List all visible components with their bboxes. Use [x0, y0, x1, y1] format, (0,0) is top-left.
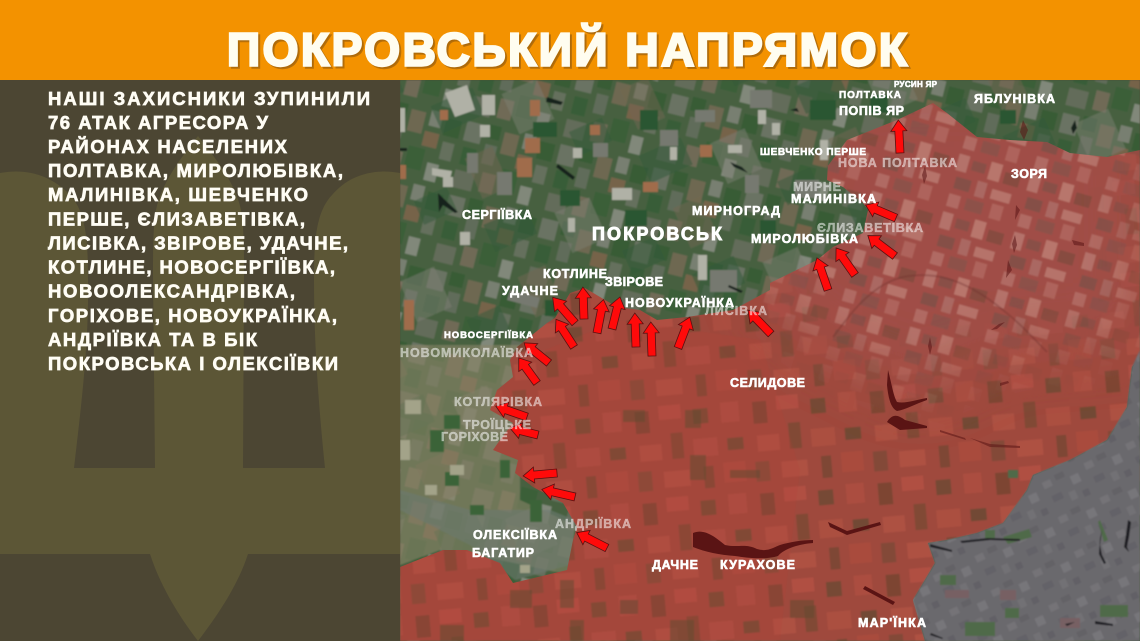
map labels: ЄЛИЗАВЕТІВКА	[817, 221, 923, 235]
text block: summary: ГОРІХОВЕ, НОВОУКРАЇНКА,	[48, 305, 337, 326]
map labels: ЛИСІВКА	[705, 304, 767, 318]
map labels: ГОРІХОВЕ	[441, 430, 508, 444]
text block: summary: 76 АТАК АГРЕСОРА У	[48, 112, 268, 133]
map labels: НОВА ПОЛТАВКА	[838, 156, 957, 170]
text block: summary: МАЛИНІВКА, ШЕВЧЕНКО	[48, 184, 308, 205]
map labels: АНДРІЇВКА	[555, 516, 631, 531]
text block: summary: ПЕРШЕ, ЄЛИЗАВЕТІВКА,	[48, 208, 305, 230]
map labels: РУСИН ЯР	[894, 80, 938, 89]
text block: summary: РАЙОНАХ НАСЕЛЕНИХ	[48, 136, 288, 157]
map labels: КОТЛИНЕ	[543, 267, 607, 281]
icon: trident watermark	[0, 136, 400, 641]
red occupied territory	[400, 100, 1140, 641]
map labels: МИРНЕ	[793, 180, 841, 194]
arrows: attack directions	[493, 120, 908, 555]
map labels: МАР'ЇНКА	[858, 615, 926, 630]
text block: summary: ПОЛТАВКА, МИРОЛЮБІВКА,	[48, 160, 343, 181]
map labels: ТРОЇЦЬКЕ	[463, 417, 531, 432]
left panel background	[0, 80, 400, 641]
map labels: МИРНОГРАД	[692, 204, 780, 218]
map labels	[400, 80, 1055, 630]
text block: summary	[48, 88, 370, 374]
map labels: ЯБЛУНІВКА	[974, 92, 1055, 106]
text block: summary: ЛИСІВКА, ЗВІРОВЕ, УДАЧНЕ,	[48, 232, 348, 254]
map labels: ПОПІВ ЯР	[839, 104, 904, 118]
map labels: КОТЛЯРІВКА	[454, 395, 542, 409]
map labels: НОВОСЕРГІЇВКА	[444, 330, 533, 341]
map labels: БАГАТИР	[472, 546, 534, 560]
text block: summary: ПОКРОВСЬКА І ОЛЕКСІЇВКИ	[48, 353, 338, 374]
map labels: ПОКРОВСЬК	[592, 224, 723, 244]
map labels: СЕЛИДОВЕ	[730, 376, 805, 390]
map labels: ПОЛТАВКА	[839, 90, 901, 101]
title: ПОКРОВСЬКИЙ НАПРЯМОК	[227, 24, 908, 76]
header bar	[0, 0, 1140, 80]
text block: summary: АНДРІЇВКА ТА В БІК	[48, 329, 258, 350]
map labels: ЗВІРОВЕ	[605, 275, 663, 289]
map labels: МИРОЛЮБІВКА	[751, 232, 858, 246]
map labels: МАЛИНІВКА	[791, 192, 876, 206]
map imagery base	[400, 80, 1140, 641]
text block: summary: НАШІ ЗАХИСНИКИ ЗУПИНИЛИ	[48, 88, 370, 109]
map labels: ЗОРЯ	[1011, 167, 1047, 181]
map labels: КУРАХОВЕ	[720, 558, 795, 572]
map labels: ДАЧНЕ	[652, 558, 698, 572]
grey urban area: Donetsk	[913, 350, 1140, 641]
text block: summary: КОТЛИНЕ, НОВОСЕРГІЇВКА,	[48, 256, 335, 278]
map labels: ОЛЕКСІЇВКА	[473, 527, 557, 542]
title: ПОКРОВСЬКИЙ НАПРЯМОК	[229, 26, 910, 78]
map labels: СЕРГІЇВКА	[462, 207, 532, 222]
map labels: НОВОУКРАЇНКА	[625, 295, 734, 310]
map labels: ШЕВЧЕНКО ПЕРШЕ	[760, 147, 866, 158]
map labels: УДАЧНЕ	[502, 284, 558, 298]
text block: summary: НОВООЛЕКСАНДРІВКА,	[48, 280, 295, 302]
map labels: НОВОМИКОЛАЇВКА	[400, 345, 533, 360]
panel: map	[400, 80, 1140, 641]
water bodies	[693, 120, 1084, 605]
